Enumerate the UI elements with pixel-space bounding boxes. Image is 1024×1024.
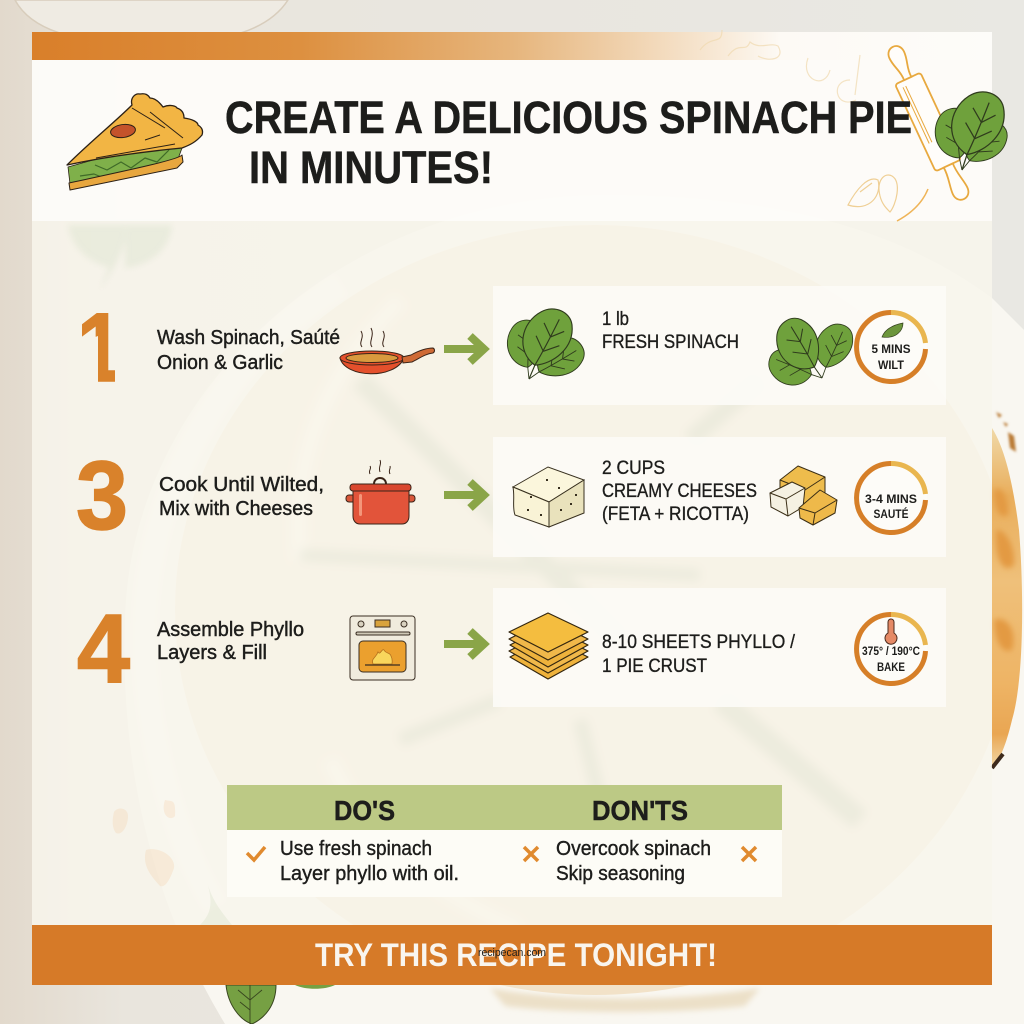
don'ts heading: DON'TS <box>592 795 688 826</box>
icon: rolling pin and spinach <box>848 41 1014 221</box>
watermark: recipecan.com <box>478 947 546 959</box>
ingredient text <box>602 308 739 353</box>
step 1 text: Wash Spinach, Saúté <box>157 327 340 349</box>
icon: feta block <box>513 467 584 527</box>
icon: oven <box>350 616 415 680</box>
timer ring: 3-4 mins saute <box>855 462 927 534</box>
header panel <box>32 60 992 221</box>
faint background details <box>68 225 232 925</box>
timer ring: bake temperature: BAKE <box>877 660 905 674</box>
ingredient text: 8-10 SHEETS PHYLLO / <box>602 631 796 653</box>
step number 4: 4 <box>77 594 130 703</box>
icon: cross <box>524 847 538 861</box>
don'ts list <box>556 838 711 885</box>
call to action banner: TRY THIS RECIPE TONIGHT! <box>315 937 717 973</box>
ingredient text: 1 lb <box>602 308 629 330</box>
ingredient text: 1 PIE CRUST <box>602 655 707 677</box>
do's and don'ts panel <box>227 785 782 897</box>
timer ring: 5 mins wilt <box>855 311 927 383</box>
ingredient text: (FETA + RICOTTA) <box>602 503 749 525</box>
title <box>225 92 912 193</box>
do's list: Use fresh spinach <box>280 838 432 860</box>
arrow <box>444 482 484 508</box>
ingredient card 2 <box>493 437 946 557</box>
timer ring: bake temperature: 375° / 190°C <box>862 644 920 658</box>
step 1 text: Onion & Garlic <box>157 352 283 374</box>
ingredient card 1 <box>493 286 946 405</box>
bottom spinach leaf <box>226 985 335 1024</box>
ingredient text: CREAMY CHEESES <box>602 480 757 502</box>
timer ring: 3-4 mins saute: 3-4 MINS <box>865 492 917 506</box>
step 4 row <box>77 594 484 703</box>
faint sketch doodles in header <box>700 30 860 102</box>
timer ring: 5 mins wilt: WILT <box>878 358 905 372</box>
timer ring: bake temperature <box>855 613 927 685</box>
ingredient text: 2 CUPS <box>602 457 665 479</box>
step 1 text <box>157 327 340 374</box>
do's heading: DO'S <box>334 795 395 826</box>
step 4 text: Layers & Fill <box>157 642 267 664</box>
icon: phyllo stack <box>509 613 588 679</box>
step 3 text <box>159 474 324 520</box>
icon: cheese cubes <box>770 466 837 525</box>
step 4 text: Assemble Phyllo <box>157 619 304 641</box>
do's list <box>280 838 459 885</box>
step number 1: 1 <box>77 293 123 402</box>
arrow <box>444 336 484 362</box>
title: CREATE A DELICIOUS SPINACH PIE <box>225 92 912 143</box>
icon: cooking pot <box>346 460 415 524</box>
don'ts list: Overcook spinach <box>556 838 711 860</box>
icon: pie slice <box>67 94 203 190</box>
main translucent panel <box>32 221 992 925</box>
icon: spinach bunch <box>505 301 591 394</box>
step 3 row <box>76 441 484 550</box>
step number 3: 3 <box>76 441 128 550</box>
icon: check <box>247 847 265 860</box>
title: IN MINUTES! <box>249 142 493 193</box>
step 4 text <box>157 619 304 664</box>
arrow <box>444 631 484 657</box>
call to action banner <box>32 925 992 985</box>
icon: cross <box>742 847 756 861</box>
header gradient bar <box>32 32 992 60</box>
don'ts list: Skip seasoning <box>556 863 685 885</box>
icon: frying pan <box>340 328 434 374</box>
ingredient text <box>602 631 796 677</box>
step 3 text: Mix with Cheeses <box>159 498 313 520</box>
ingredient text: FRESH SPINACH <box>602 331 739 353</box>
step 3 text: Cook Until Wilted, <box>159 474 324 496</box>
timer ring: 5 mins wilt: 5 MINS <box>872 342 910 356</box>
ingredient text <box>602 457 757 525</box>
ingredient card 3 <box>493 588 946 707</box>
icon: spinach leaves <box>764 311 858 394</box>
step 1 row <box>82 313 490 382</box>
do's list: Layer phyllo with oil. <box>280 863 459 885</box>
timer ring: 3-4 mins saute: SAUTÉ <box>874 506 908 521</box>
